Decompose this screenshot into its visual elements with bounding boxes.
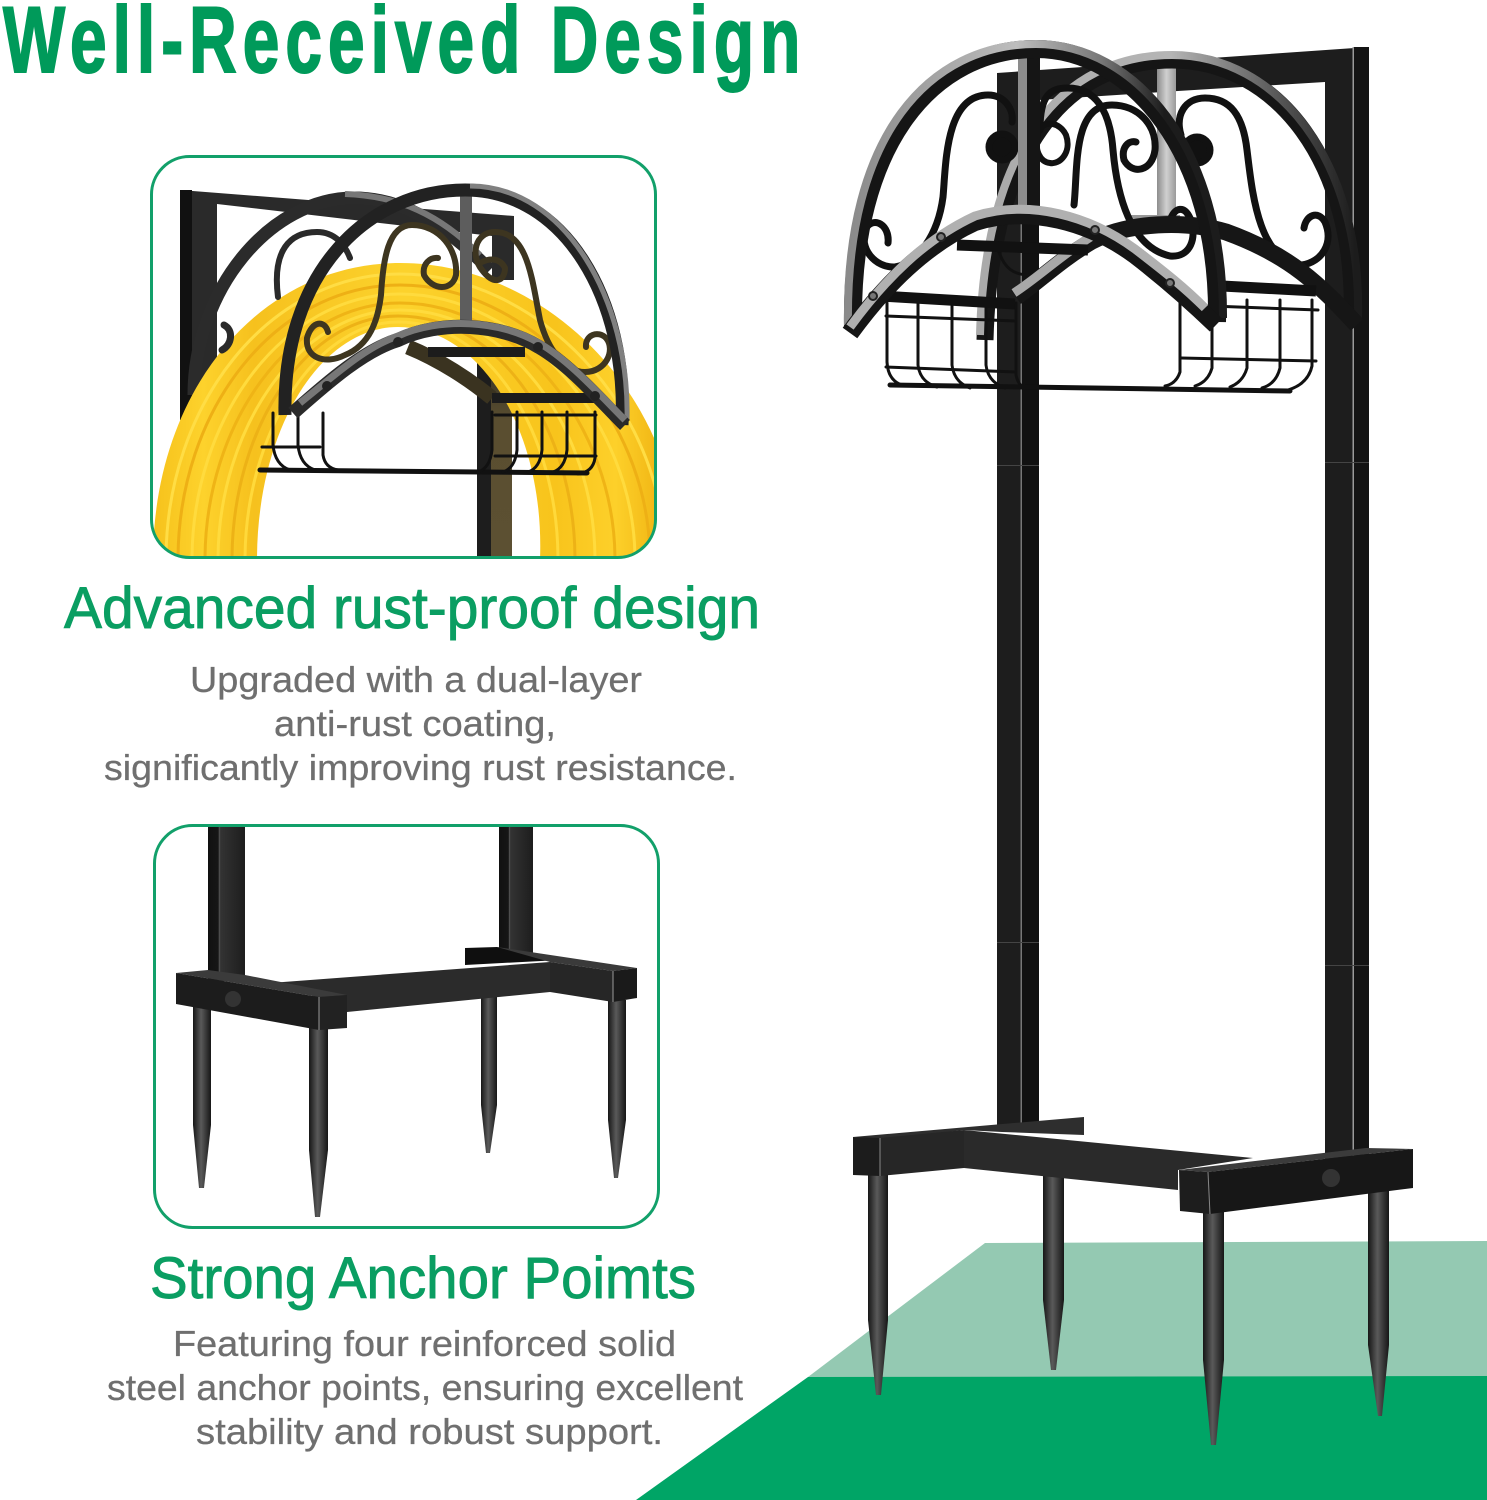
panel: hose rack with yellow hose [152, 156, 680, 560]
back frame and posts [997, 47, 1369, 1167]
scrolls [222, 225, 610, 372]
ground: light green [808, 1241, 1487, 1377]
text block: rust-proof description [104, 659, 737, 788]
text block: anchor description [107, 1323, 743, 1452]
center vertical [1018, 55, 1040, 213]
back frame and posts [180, 190, 514, 560]
spike 3 [481, 995, 497, 1153]
rear arch and bars [408, 347, 596, 398]
heading: advanced rust-proof design: Advanced rust-proof design [64, 576, 760, 641]
rear arc [980, 55, 1358, 340]
center post [460, 195, 472, 325]
text block: anchor description: Featuring four reinforced solid [173, 1323, 676, 1364]
left post [208, 826, 245, 981]
spike back left [1043, 1170, 1064, 1370]
spike front left [868, 1172, 888, 1395]
spike 1 [193, 1005, 211, 1188]
rear cross stub [465, 947, 546, 965]
cross bars [880, 245, 1316, 304]
text block: anchor description: stability and robust support. [196, 1411, 663, 1452]
rear vertical [1130, 62, 1180, 223]
front arc [848, 44, 1223, 328]
front arc [285, 186, 627, 425]
text block: anchor description: steel anchor points, ensuring excellent [107, 1367, 743, 1408]
base: rear stub and left cross [853, 1117, 1084, 1176]
scrolls [864, 88, 1328, 275]
spike back right [1368, 1188, 1389, 1416]
long bar [270, 962, 550, 1012]
basket [886, 300, 1318, 391]
heading: strong anchor points: Strong Anchor Poimts [150, 1246, 696, 1311]
text block: rust-proof description: significantly improving rust resistance. [104, 747, 737, 788]
panel border [152, 156, 656, 558]
front arch [293, 324, 625, 425]
ground: dark green [636, 1376, 1487, 1500]
base: long bar [964, 1130, 1253, 1190]
front arch [850, 209, 1216, 333]
base: right cross [1179, 1148, 1413, 1214]
yellow hose [153, 263, 680, 560]
spike front right [1203, 1210, 1224, 1445]
text block: rust-proof description: Upgraded with a dual-layer [190, 659, 642, 700]
basket [260, 412, 596, 474]
spike 2 [309, 1028, 328, 1217]
main hose rack product [848, 44, 1413, 1445]
panel: anchor base [154, 826, 658, 1228]
left cross [176, 970, 347, 1030]
bolts [869, 226, 1174, 300]
rear arc [194, 194, 490, 395]
panel border [154, 826, 658, 1228]
rear post [499, 826, 533, 961]
rear arch [1014, 225, 1357, 325]
spike 4 [608, 1000, 626, 1178]
right cross [497, 947, 637, 1002]
text block: rust-proof description: anti-rust coating, [274, 703, 556, 744]
